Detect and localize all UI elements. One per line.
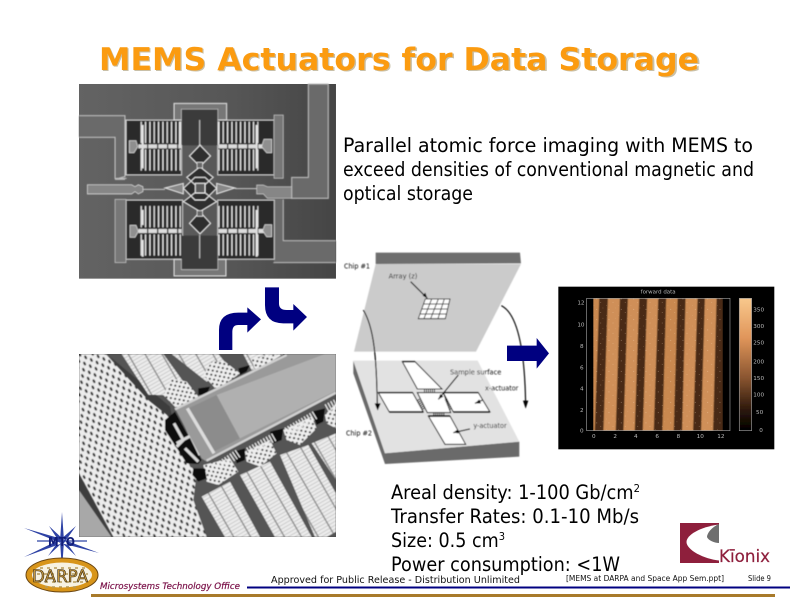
data plot: forward data: 350 [753,307,765,313]
data plot: forward data: 300 [753,324,765,330]
title: MEMS Actuators for Data Storage [99,42,699,78]
title: MEMS Actuators for Data Storage [100,43,701,79]
lower chip [353,361,519,464]
MTO star logo [24,512,99,570]
specifications text: Power consumption: <1W [391,553,620,576]
specifications text [390,481,640,576]
traces [79,116,125,177]
data plot: forward data [558,287,774,449]
MTO star logo: MTO [48,534,75,549]
paragraph: parallel atomic force imaging [343,134,754,205]
comb fingers [141,132,258,245]
specifications text: 2 [634,482,640,495]
data plot: forward data: 10 [577,323,585,329]
upper comb bands [122,354,283,395]
data plot: forward data: 2 [613,434,617,440]
data plot: forward data: 4 [580,387,584,393]
data plot: forward data: 2 [580,408,584,414]
data plot: forward data: 0 [580,429,584,435]
data plot: forward data: 12 [717,434,725,440]
data plot: forward data: 250 [753,341,765,347]
lower comb bands [202,433,336,537]
specifications text: Size: 0.5 cm [391,529,511,552]
labels [344,262,519,437]
actuator quadrants [126,120,182,175]
data plot: forward data: 0 [759,428,763,434]
black gaps [165,412,202,464]
paragraph: parallel atomic force imaging: exceed densities of conventional magnetic and [343,158,754,181]
office label: Microsystems Technology Office [100,582,240,592]
Kionix logo: Kīonix [719,547,770,567]
paragraph: parallel atomic force imaging: optical storage [343,182,473,205]
large right arrow [507,338,549,369]
data plot: forward data: 200 [753,359,765,365]
data plot: forward data: 0 [592,434,596,440]
footer file reference: [MEMS at DARPA and Space App Sem.ppt] [566,574,724,583]
SEM image: MEMS actuator top view [79,84,336,279]
comb teeth [211,403,336,472]
labels: x-actuator [485,384,519,392]
data plot: forward data: 8 [677,434,681,440]
top and bottom caps [174,103,227,276]
upper hex blobs [163,354,277,408]
chip diagram [344,253,528,464]
lower hex blobs [203,403,336,485]
paragraph: parallel atomic force imaging: Parallel atomic force imaging with MEMS to [343,134,753,157]
Kionix logo [680,523,770,567]
leader arrows [363,282,526,433]
specifications text: Areal density: 1-100 Gb/cm [391,481,657,504]
data plot: forward data: 50 [756,410,764,416]
array grid [418,299,450,319]
plot image [590,295,727,434]
specifications text: 3 [499,530,505,543]
specifications text: Transfer Rates: 0.1-10 Mb/s [390,505,639,528]
data plot: forward data: 100 [753,393,765,399]
data plot: forward data: 6 [655,434,659,440]
labels: Sample surface [450,368,501,376]
curved arrows [219,287,307,350]
data plot: forward data: 4 [634,434,638,440]
gray beam [175,354,336,462]
actuators [378,362,490,444]
upper chip [376,253,521,264]
data plot: forward data: 6 [580,365,584,371]
slide number: Slide 9 [748,574,771,583]
probe arms [87,185,143,194]
labels: Array (z) [389,272,418,280]
data plot: forward data: forward data [641,289,676,295]
labels: y-actuator [473,422,507,430]
footer rules [91,586,790,597]
perforated plate [79,354,207,537]
data plot: forward data: 150 [753,376,765,382]
data plot: forward data: 10 [697,434,704,440]
DARPA logo [26,558,98,592]
DARPA logo: DARPA [32,567,88,587]
labels: Chip #2 [346,429,372,437]
side pads [129,139,272,237]
data plot: forward data: 8 [580,344,584,350]
SEM image: comb actuator close-up [79,354,336,537]
footer approval text: Approved for Public Release - Distribution Unlimited [271,575,520,586]
data plot: forward data: 12 [577,301,585,307]
labels: Chip #1 [344,262,370,270]
center diamonds [183,145,217,234]
